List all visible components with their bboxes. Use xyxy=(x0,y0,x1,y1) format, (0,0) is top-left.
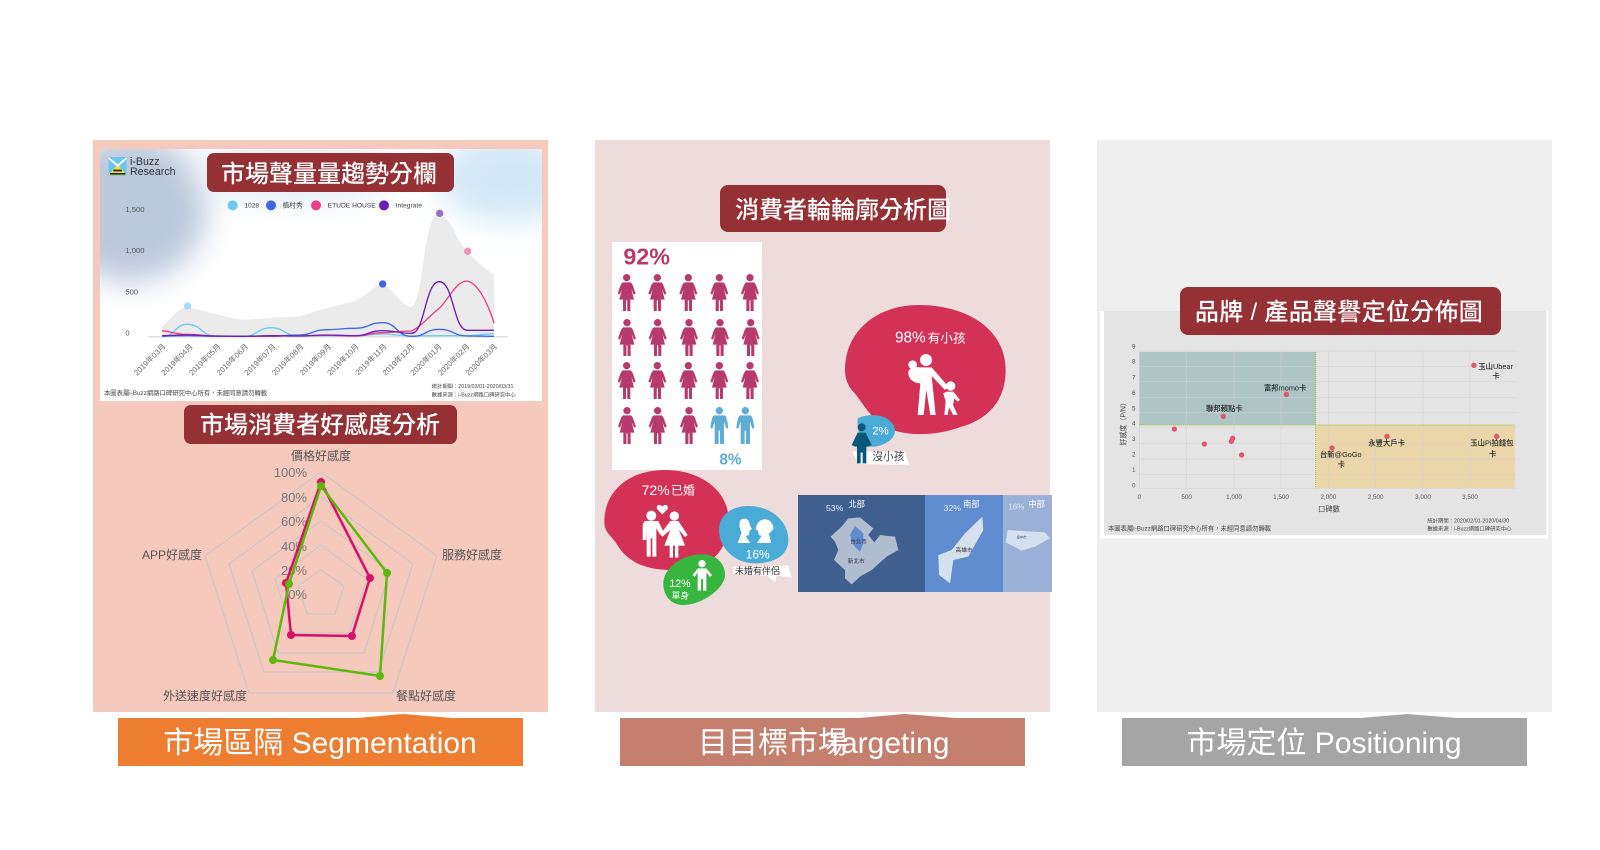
bubble: with children xyxy=(845,305,1006,434)
panel: targeting xyxy=(595,140,1052,712)
y axis labels: 1,500 xyxy=(125,205,145,214)
logo: Research xyxy=(130,166,176,178)
map region: central: 臺中市 xyxy=(1017,535,1027,540)
scatter chart: brand positioning: 1,000 xyxy=(1226,494,1242,501)
y axis labels: 1,000 xyxy=(125,246,145,255)
legend: Integrate xyxy=(396,203,422,210)
scatter chart: brand positioning: 卡 xyxy=(1489,449,1496,458)
month labels: 2019年12月 xyxy=(380,341,416,377)
scatter chart: brand positioning: 統計期間：2020/02/01-2020/04/30 xyxy=(1427,516,1509,524)
bubble: married xyxy=(604,470,728,570)
scatter chart: brand positioning: 本圖表屬i-Buzz網路口碑研究中心所有，未經同意請勿轉載 xyxy=(1108,523,1272,532)
heading: positioning map xyxy=(1180,287,1501,335)
radar chart: 外送速度好感度 xyxy=(163,688,247,703)
scatter chart: brand positioning: 2,500 xyxy=(1368,494,1384,501)
legend: 1028 xyxy=(244,203,259,210)
quadrant: high favorability xyxy=(1139,352,1316,425)
month labels: 2019年08月 xyxy=(269,341,305,377)
map region: north: 北部 xyxy=(848,499,865,509)
map region: south xyxy=(925,495,1003,592)
bubble: unmarried with partner: 未婚有伴侶 xyxy=(735,565,780,576)
logo: i-Buzz xyxy=(130,156,160,168)
scatter chart: brand positioning: 卡 xyxy=(1492,372,1500,381)
label bar: segmentation: 市場區隔 Segmentation xyxy=(163,727,477,760)
scatter chart: brand positioning: 好感度（P/N） xyxy=(1119,399,1128,446)
legend xyxy=(228,200,422,210)
card: gender pictogram: 92% xyxy=(623,243,670,269)
month labels: 2020年01月 xyxy=(408,341,444,377)
pink series xyxy=(282,478,374,640)
radar chart: 0% xyxy=(288,587,307,602)
logo xyxy=(109,156,176,178)
scatter chart: brand positioning: 3,000 xyxy=(1415,494,1431,501)
radar chart: 40% xyxy=(281,539,307,554)
scatter chart: brand positioning: 富邦momo卡 xyxy=(1264,383,1306,392)
month labels: 2019年05月 xyxy=(186,341,222,377)
line chart: market volume trend xyxy=(100,149,542,401)
month labels: 2020年02月 xyxy=(435,341,471,377)
heading: trend: 市場聲量量趨勢分欄 xyxy=(221,161,437,188)
map region: south: 高雄市 xyxy=(956,546,973,554)
series lines xyxy=(162,281,494,337)
card: gender pictogram xyxy=(612,242,762,470)
heading: consumer profile xyxy=(720,185,951,232)
map region: central: 16% xyxy=(1008,503,1024,512)
label bar: targeting: 目目標市場 xyxy=(698,727,848,760)
quadrant: high volume xyxy=(1316,425,1515,488)
heading: trend xyxy=(207,153,454,192)
radar chart: 20% xyxy=(281,563,307,578)
scatter chart: brand positioning xyxy=(1100,311,1548,538)
scatter chart: brand positioning: 8 xyxy=(1132,359,1136,366)
legend: ETUDE HOUSE xyxy=(328,203,376,210)
green series xyxy=(269,482,391,680)
label bar: positioning: 市場定位 Positioning xyxy=(1186,727,1462,760)
source note: 統計期間：2019/03/01-2020/03/31 xyxy=(432,382,513,390)
radar chart: 餐點好感度 xyxy=(396,688,456,703)
scatter chart: brand positioning: 2 xyxy=(1132,452,1136,459)
bubble: with children: 有小孩 xyxy=(928,332,966,346)
bubble: no children: 沒小孩 xyxy=(872,450,905,463)
month labels: 2019年06月 xyxy=(214,341,250,377)
scatter chart: brand positioning: 聯邦賴點卡 xyxy=(1206,404,1243,413)
month labels: 2020年03月 xyxy=(463,341,499,377)
scatter chart: brand positioning: 0 xyxy=(1138,494,1142,501)
bubble: no children: 2% xyxy=(872,426,889,438)
map region: central xyxy=(1003,495,1052,592)
map region: south: 32% xyxy=(944,503,961,513)
y axis labels xyxy=(125,205,145,338)
scatter chart: brand positioning: 9 xyxy=(1132,343,1136,350)
scatter chart: brand positioning: 1,500 xyxy=(1273,494,1289,501)
scatter chart: brand positioning: 6 xyxy=(1132,390,1136,397)
map region: north xyxy=(798,495,925,592)
bubble: married: 72% xyxy=(642,482,670,498)
bubble: married: 已婚 xyxy=(671,483,695,497)
data points xyxy=(1172,363,1499,458)
bubble: single: 單身 xyxy=(672,589,689,600)
bubble: no children xyxy=(852,415,909,465)
bubble: single xyxy=(663,554,725,605)
month labels: 2019年09月 xyxy=(297,341,333,377)
scatter chart: brand positioning: 2,000 xyxy=(1320,494,1337,501)
map: regional distribution xyxy=(798,495,1052,592)
heading: consumer profile: 消費者輪輪廓分析圖 xyxy=(735,197,951,224)
scatter chart: brand positioning: 玉山Ubear xyxy=(1478,362,1514,371)
label bar: targeting xyxy=(620,714,1025,766)
month labels xyxy=(131,341,499,377)
scatter chart: brand positioning: 1 xyxy=(1132,467,1136,474)
scatter chart: brand positioning: 5 xyxy=(1132,405,1136,412)
peak markers xyxy=(184,302,191,310)
scatter chart: brand positioning: 玉山Pi拍錢包 xyxy=(1470,439,1514,448)
radar chart: 服務好感度 xyxy=(442,547,502,562)
total area xyxy=(162,213,494,337)
y axis labels: 500 xyxy=(125,288,138,297)
panel: positioning xyxy=(1097,140,1552,712)
radar chart: APP好感度 xyxy=(142,547,202,562)
scatter chart: brand positioning: 3,500 xyxy=(1462,494,1478,501)
source note: 本圖表屬i-Buzz網路口碑研究中心所有，未經同意請勿轉載 xyxy=(104,388,268,397)
panel: segmentation xyxy=(93,140,548,712)
month labels: 2019年10月 xyxy=(325,341,361,377)
map region: north: 53% xyxy=(826,503,844,513)
radar chart: 80% xyxy=(281,490,307,505)
map region: south: 南部 xyxy=(963,499,980,509)
scatter chart: brand positioning: 卡 xyxy=(1338,460,1345,469)
scatter chart: brand positioning: 數據來源：i-Buzz網路口碑研究中心 xyxy=(1427,525,1512,533)
month labels: 2019年04月 xyxy=(159,341,195,377)
radar chart: 100% xyxy=(274,465,307,480)
card: gender pictogram: 8% xyxy=(719,452,742,469)
scatter chart: brand positioning: 500 xyxy=(1181,494,1192,501)
bubble: single: 12% xyxy=(669,578,691,590)
radar chart xyxy=(142,448,502,703)
radar chart: 價格好感度 xyxy=(291,448,351,463)
map region: central: 中部 xyxy=(1028,499,1045,509)
scatter chart: brand positioning: 口碑數 xyxy=(1318,505,1341,514)
month labels: 2019年07月 xyxy=(242,341,278,377)
source note: 數據來源：i-Buzz網路口碑研究中心 xyxy=(432,390,516,398)
scatter chart: brand positioning: 永豐大戶卡 xyxy=(1368,439,1405,448)
heading: favorability: 市場消費者好感度分析 xyxy=(200,412,440,439)
legend: 植村秀 xyxy=(283,201,303,210)
scatter chart: brand positioning: 7 xyxy=(1132,374,1136,381)
y axis labels: 0 xyxy=(125,329,130,338)
scatter chart: brand positioning: 0 xyxy=(1132,482,1136,489)
label bar: positioning xyxy=(1122,714,1527,766)
radar chart: 60% xyxy=(281,514,307,529)
month labels: 2019年03月 xyxy=(131,341,167,377)
scatter chart: brand positioning: 台新@GoGo xyxy=(1320,450,1362,459)
heading: favorability xyxy=(184,405,457,444)
source note xyxy=(104,382,516,398)
bubble: unmarried with partner: 16% xyxy=(746,547,770,561)
month labels: 2019年11月 xyxy=(353,341,388,377)
bubble: unmarried with partner xyxy=(719,506,792,582)
map region: north: 台北市 xyxy=(850,537,867,545)
bubble: with children: 98% xyxy=(895,330,926,347)
heading: positioning map: 品牌 / 產品聲譽定位分佈圖 xyxy=(1195,299,1483,326)
label bar: segmentation xyxy=(118,714,523,766)
scatter chart: brand positioning: 4 xyxy=(1132,421,1136,428)
label bar: targeting: Targeting xyxy=(826,727,949,760)
map region: north: 新北市 xyxy=(848,557,865,565)
scatter chart: brand positioning: 3 xyxy=(1132,436,1136,443)
